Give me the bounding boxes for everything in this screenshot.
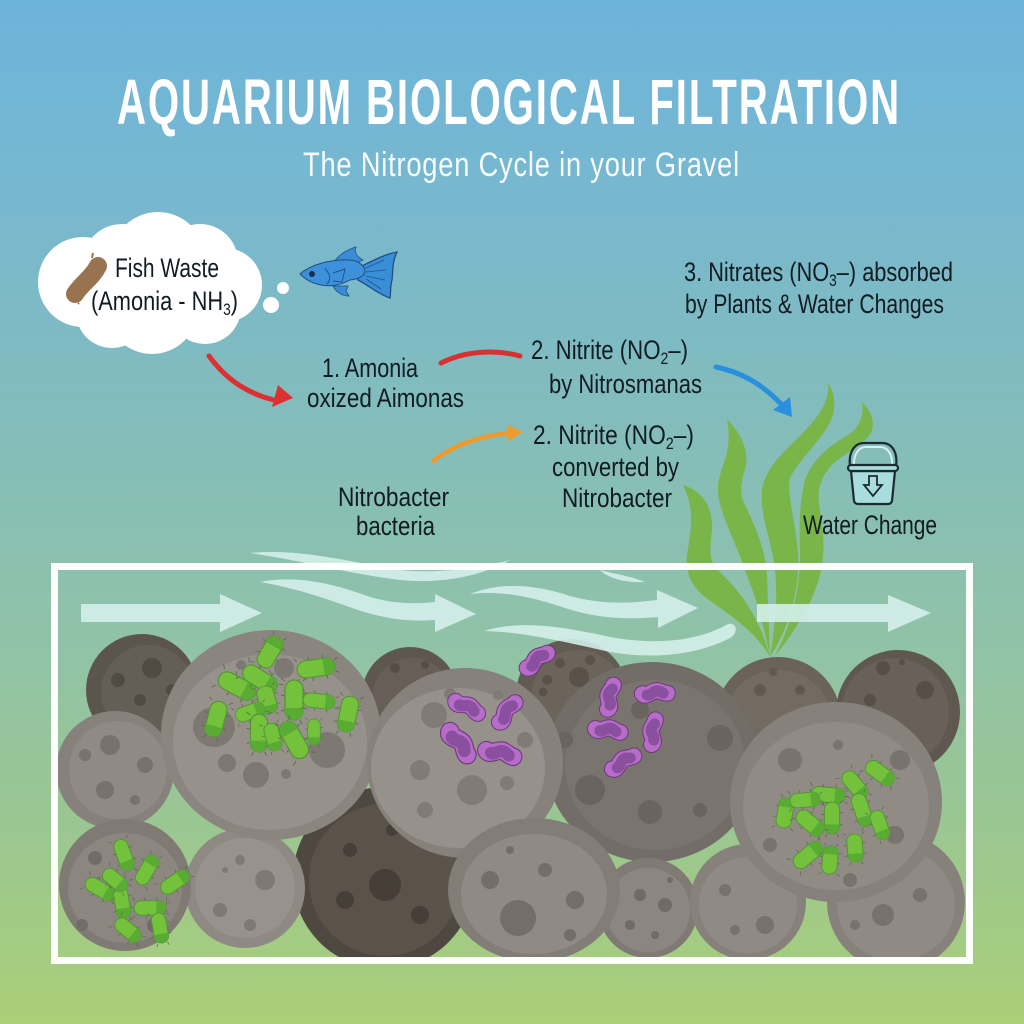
flow arrow 5 — [757, 595, 931, 632]
label: step 1: 1. Amonia — [322, 353, 419, 383]
arrow: red to step 2 — [441, 352, 520, 363]
subtitle: The Nitrogen Cycle in your Gravel — [303, 146, 740, 184]
rock: back dark 3 — [518, 639, 620, 724]
rock: bottom right — [827, 844, 965, 957]
rock: darkest bottom — [296, 788, 460, 957]
tank frame — [54, 566, 970, 960]
label: water change: Water Change — [803, 510, 937, 540]
rock: bottom small 1 — [598, 858, 698, 958]
rock: back dark 5 — [836, 650, 960, 774]
label: step 3 nitrates — [684, 257, 953, 319]
rock: left mid — [56, 711, 174, 829]
water flow arrows — [81, 552, 931, 656]
label: step 2 nitrobacter: converted by — [552, 452, 679, 482]
label: step 2 nitrosomonas: 2. Nitrite (NO — [531, 335, 689, 365]
label: step 2 nitrosomonas: 2 — [660, 349, 668, 368]
label: amonia: (Amonia - NH — [91, 286, 255, 316]
label: step 1: oxized Aimonas — [307, 383, 464, 413]
rock: lower left small — [185, 828, 305, 948]
label: step 2 nitrobacter: 2. Nitrite (NO — [533, 420, 691, 450]
label: fish waste: Fish Waste — [115, 253, 219, 283]
rock: centre dark-grey — [554, 662, 744, 862]
flow arrow 1 — [81, 594, 262, 632]
icon: blue fish — [300, 247, 397, 298]
bacteria: green cluster right — [771, 754, 902, 876]
label: amonia: 3 — [223, 300, 231, 319]
thought cloud: fish waste — [38, 212, 262, 354]
flow wisps above frame — [250, 552, 645, 582]
bacteria: green cluster lower left — [80, 835, 197, 950]
rock: bottom centre — [448, 818, 620, 962]
label: nitrobacter bacteria: bacteria — [356, 511, 436, 541]
rock: large with green bacteria — [161, 630, 381, 840]
arrow: red to step 1 — [209, 356, 293, 407]
label: step 2 nitrobacter: –) — [674, 420, 694, 450]
bacteria: purple single on back rock — [525, 653, 550, 669]
label: amonia: ) — [231, 286, 238, 316]
arrow: blue — [716, 367, 792, 417]
label: step 2 nitrosomonas — [531, 335, 702, 399]
rock: back dark 4 — [724, 657, 838, 738]
label: step 2 nitrosomonas: by Nitrosmanas — [549, 369, 702, 399]
plant — [683, 383, 873, 657]
icon: waste — [75, 253, 98, 304]
bacteria: purple cluster right — [595, 685, 667, 770]
rock: back dark 2 — [364, 647, 450, 718]
label: step 3 nitrates: 3 — [829, 271, 837, 290]
rock: middle with purple bacteria — [367, 668, 563, 858]
rock: bottom small 2 — [690, 844, 806, 960]
label: step 3 nitrates: –) absorbed — [837, 257, 953, 287]
label: nitrobacter bacteria — [338, 482, 449, 541]
flow wave 2 — [260, 579, 476, 632]
label: step 3 nitrates: by Plants & Water Changes — [685, 289, 944, 319]
gravel bed — [56, 628, 965, 971]
arrow: orange — [433, 425, 523, 461]
label: step 2 nitrobacter: Nitrobacter — [562, 483, 672, 513]
label: nitrobacter bacteria: Nitrobacter — [338, 482, 449, 512]
label: step 1 — [307, 353, 464, 413]
icon: bucket — [848, 443, 898, 504]
bacteria: green cluster top — [198, 628, 364, 766]
flow wave 4 — [484, 624, 736, 656]
label: step 2 nitrobacter — [533, 420, 694, 513]
thought bubbles — [263, 282, 289, 313]
rock: lower left with green bacteria — [59, 819, 191, 951]
label: step 3 nitrates: 3. Nitrates (NO — [684, 257, 864, 287]
rock: right with green bacteria — [730, 702, 942, 902]
bacteria: purple cluster left — [449, 696, 520, 764]
label: step 2 nitrosomonas: –) — [668, 335, 688, 365]
rock: back dark 1 — [86, 634, 191, 733]
label: step 2 nitrobacter: 2 — [666, 434, 674, 453]
flow wave 3 — [470, 586, 698, 628]
